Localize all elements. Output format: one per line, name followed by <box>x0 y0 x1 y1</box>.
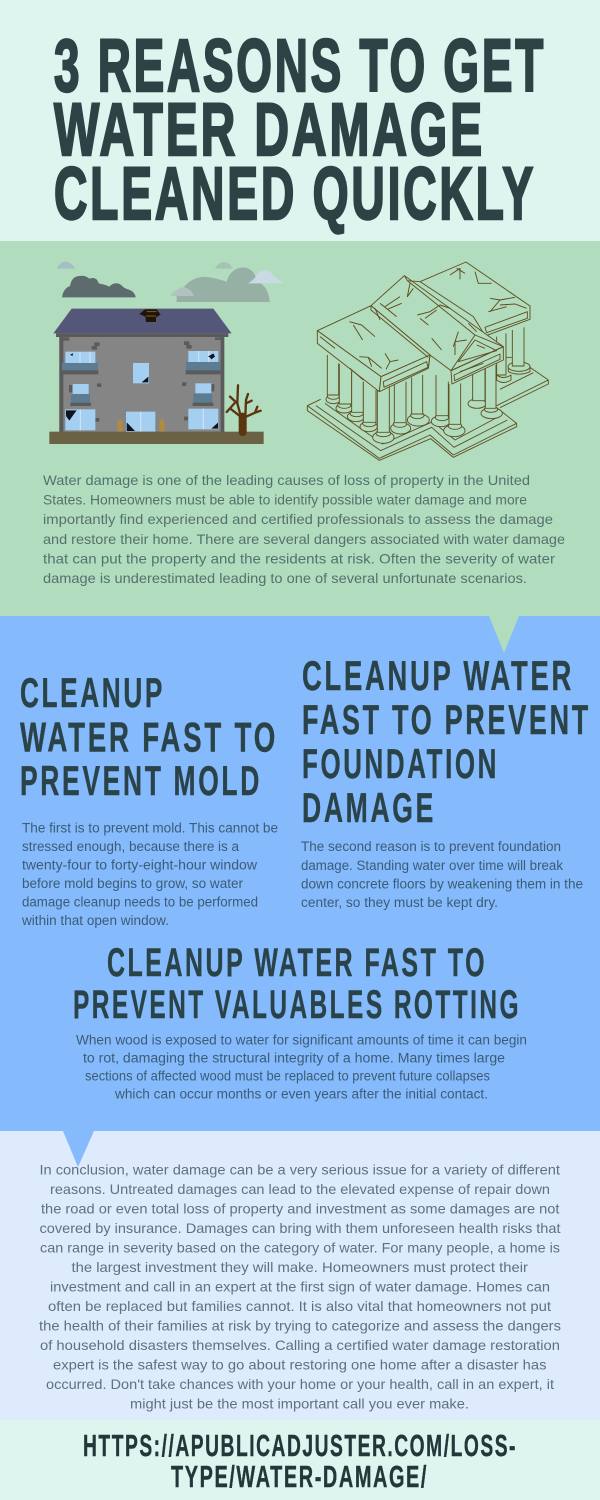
heading: mold <box>20 669 278 804</box>
text: foundation <box>301 839 583 910</box>
panel: conclusion: the health of their families at risk by trying to categorize and assess the dangers <box>39 1318 561 1334</box>
text: foundation: center, so they must be kept dry. <box>301 895 498 910</box>
icon: house windows <box>62 351 222 432</box>
temple base <box>307 367 548 460</box>
text: mold <box>21 820 278 928</box>
illustration: damaged house <box>49 262 284 444</box>
speech pointer: intro <box>489 616 519 653</box>
intro paragraph: that can put the property and the residents at risk. Often the severity of water <box>43 550 555 566</box>
panel: conclusion: investment and call in an expert at the first sign of water damage. Homes can <box>50 1278 550 1294</box>
heading: mold: WATER FAST TO <box>20 714 278 760</box>
intro paragraph: Water damage is one of the leading causes of loss of property in the United <box>43 472 530 488</box>
heading: valuables <box>73 941 521 1027</box>
panel: conclusion: expert is the safest way to go about restoring one home after a disaster has <box>53 1356 546 1372</box>
panel: conclusion: occurred. Don't take chances with your home or your health, call in an expert, it <box>46 1376 554 1392</box>
text: valuables: When wood is exposed to water for significant amounts of time it can begin <box>76 1032 527 1048</box>
text: valuables: to rot, damaging the structural integrity of a home. Many times large <box>83 1050 505 1066</box>
illustration: cracked temple <box>307 262 548 460</box>
temple roofs <box>420 262 530 336</box>
intro paragraph <box>43 472 565 586</box>
panel: conclusion: reasons. Untreated damages can lead to the elevated expense of repair down <box>50 1181 550 1197</box>
intro paragraph: importantly find experienced and certified professionals to assess the damage <box>43 511 553 527</box>
panel: reason 1 mold <box>20 669 278 928</box>
heading: foundation: DAMAGE <box>302 784 436 831</box>
panel: reason 3 valuables <box>73 941 527 1102</box>
title <box>54 24 546 235</box>
icon: clouds <box>57 262 284 302</box>
panel: conclusion: of household disasters themselves. Calling a certified water damage restoration <box>40 1337 560 1353</box>
intro paragraph: and restore their home. There are several dangers associated with water damage <box>43 531 565 547</box>
heading: mold: PREVENT MOLD <box>20 757 262 804</box>
text: mold: twenty-four to forty-eight-hour window <box>22 858 257 872</box>
heading: foundation <box>302 652 591 831</box>
icon: house walls <box>59 337 224 432</box>
text: mold: The first is to prevent mold. This cannot be <box>22 820 278 836</box>
footer url: TYPE/WATER-DAMAGE/ <box>171 1459 428 1494</box>
panel: conclusion: often be replaced but families cannot. It is also vital that homeowners not put <box>48 1298 551 1314</box>
icon: bare tree <box>227 385 261 432</box>
footer url <box>83 1428 517 1494</box>
icon: house roof <box>53 309 232 333</box>
speech pointer: reasons <box>63 1131 94 1167</box>
text: mold: stressed enough, because there is a <box>22 839 239 854</box>
panel: conclusion: the road or even total loss of property and investment as some damages are not <box>41 1200 560 1216</box>
heading: mold: CLEANUP <box>20 669 165 716</box>
text: foundation: The second reason is to prevent foundation <box>301 839 561 854</box>
panel: reason 2 foundation <box>301 652 591 910</box>
panel: conclusion <box>39 1162 561 1412</box>
temple columns <box>326 327 530 443</box>
panel: conclusion: In conclusion, water damage can be a very serious issue for a variety of different <box>40 1162 560 1178</box>
panel: conclusion: might just be the most important call you ever make. <box>130 1396 469 1412</box>
panel: conclusion: covered by insurance. Damages can bring with them unforeseen health risks that <box>40 1220 561 1236</box>
text: mold: within that open window. <box>21 913 169 928</box>
intro paragraph: States. Homeowners must be able to identify possible water damage and more <box>43 492 527 508</box>
temple cracks <box>320 268 527 380</box>
intro paragraph: damage is underestimated leading to one of several unfortunate scenarios. <box>43 570 527 586</box>
text: foundation: down concrete floors by weakening them in the <box>301 876 583 892</box>
text: mold: damage cleanup needs to be performed <box>22 894 258 910</box>
text: valuables: which can occur months or even years after the initial contact. <box>114 1086 488 1102</box>
text: mold: before mold begins to grow, so water <box>22 876 244 891</box>
text: foundation: damage. Standing water over time will break <box>301 858 563 873</box>
text: valuables: sections of affected wood must be replaced to prevent future collapses <box>85 1068 490 1084</box>
panel: conclusion: the largest investment they will make. Homeowners must protect their <box>72 1259 528 1275</box>
panel: conclusion: can range in severity based on the category of water. For many people, a home is <box>40 1240 560 1256</box>
text: valuables <box>76 1032 527 1102</box>
icon: ground <box>49 432 264 444</box>
